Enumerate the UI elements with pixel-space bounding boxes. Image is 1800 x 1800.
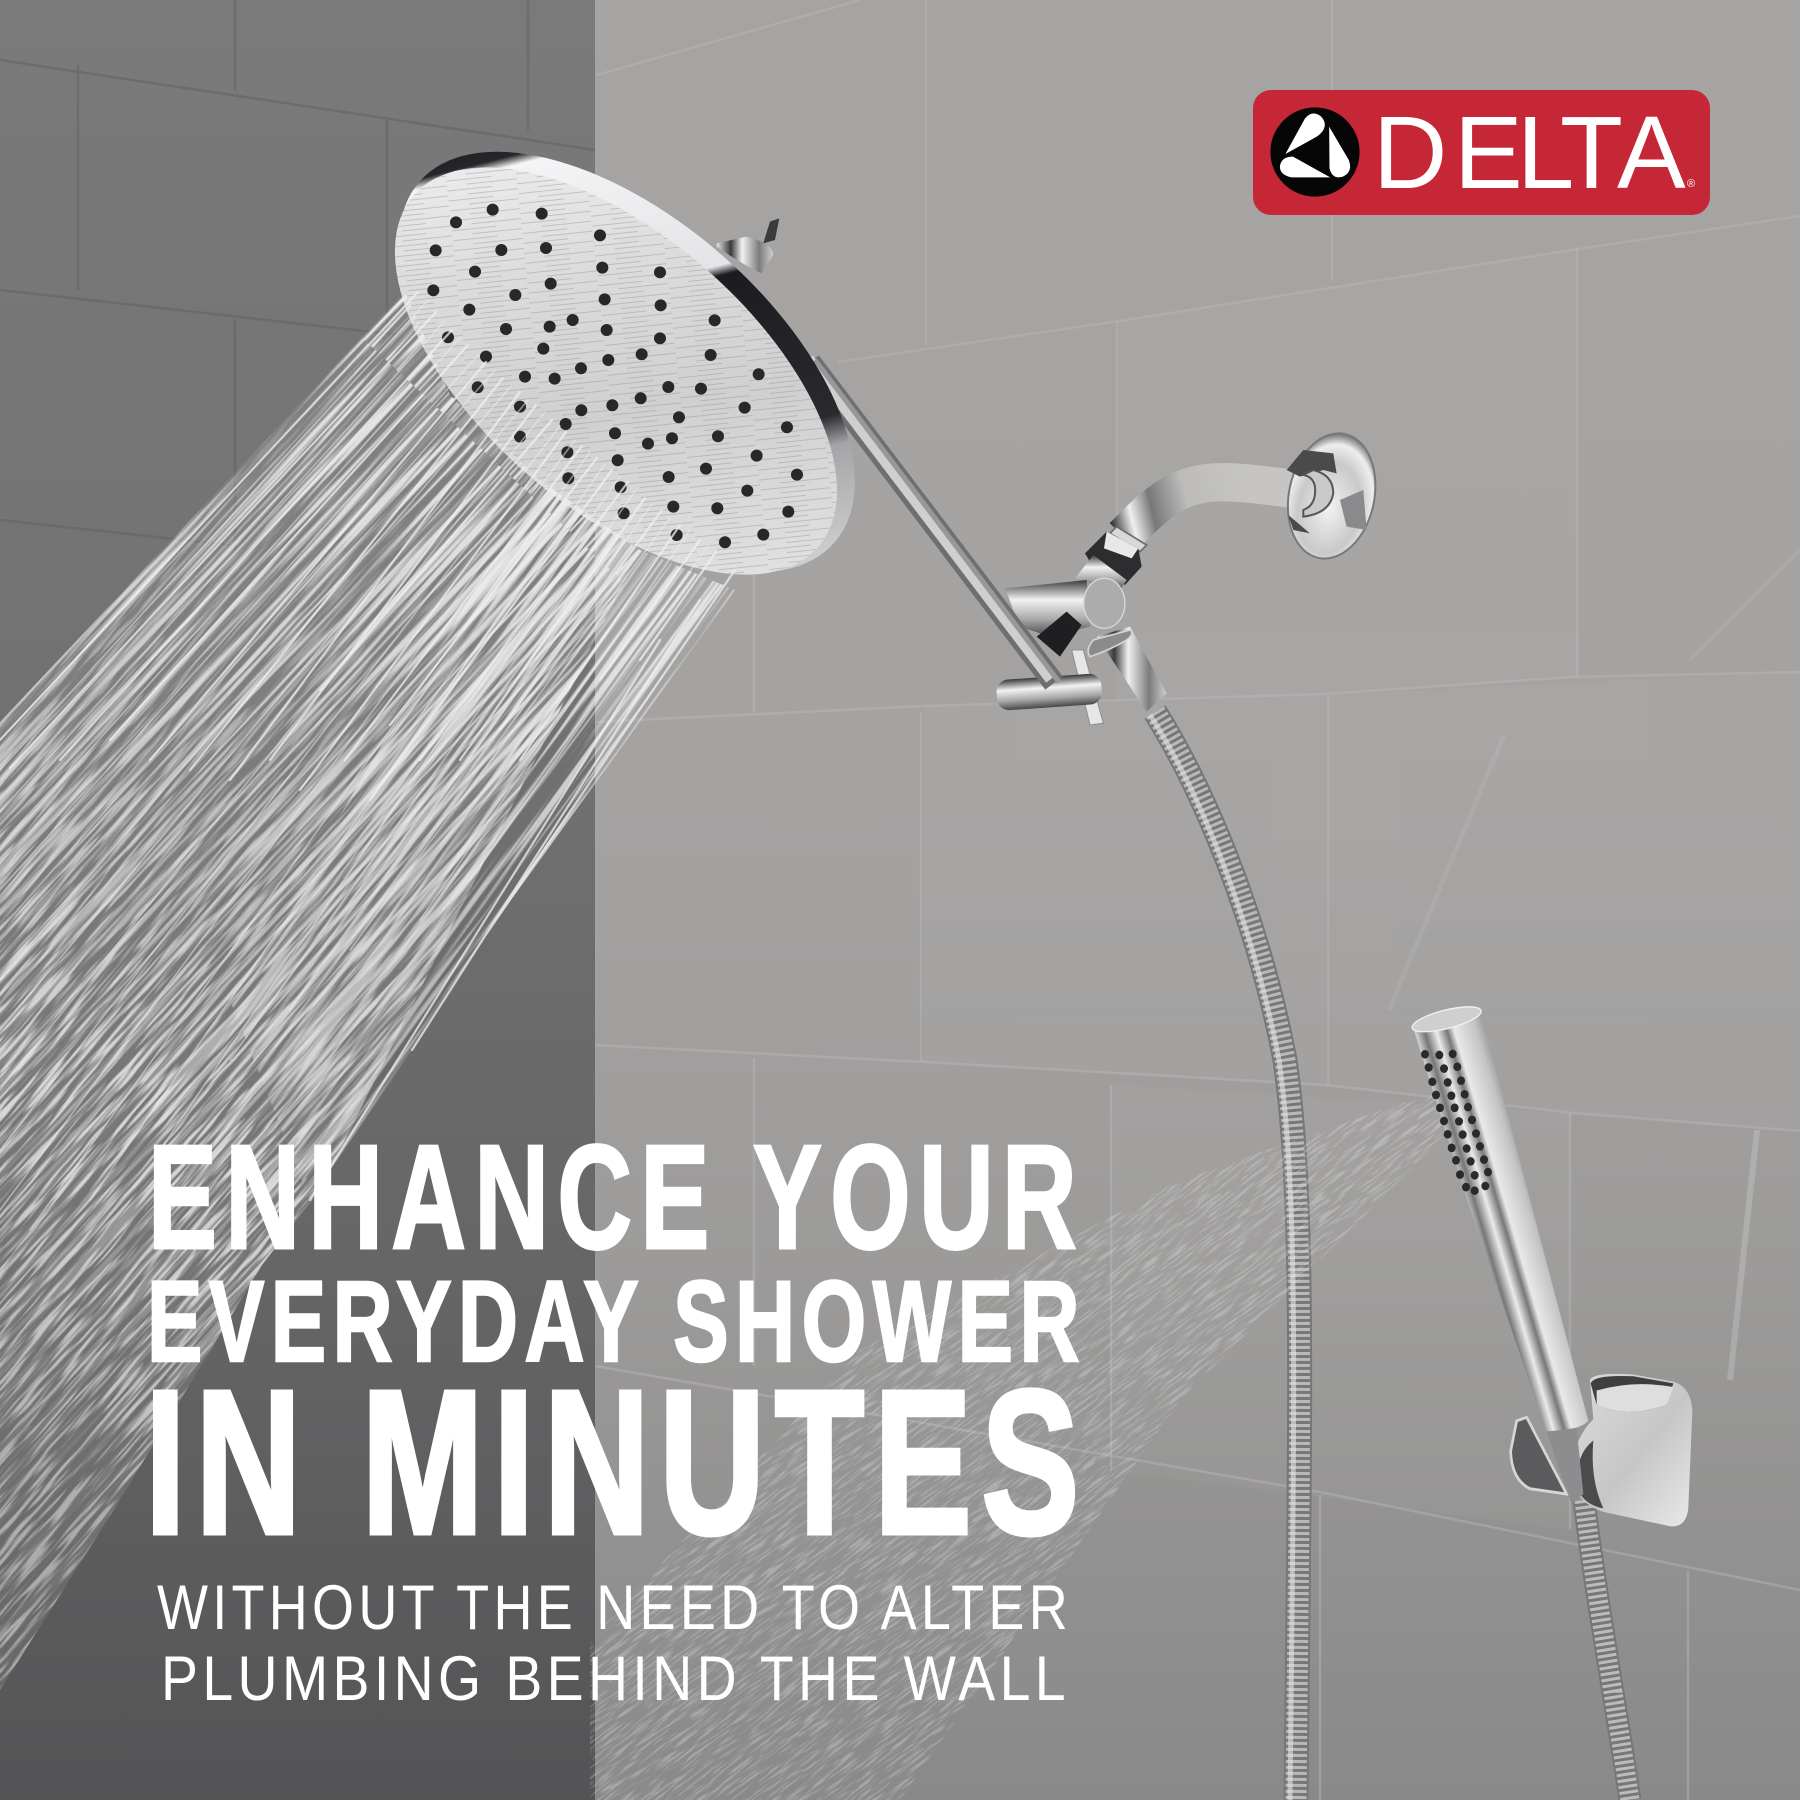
badge background xyxy=(1253,90,1710,215)
spray long streaks, right xyxy=(230,480,735,1200)
headline line 2: EVERYDAY SHOWER xyxy=(147,1258,1086,1386)
shower head xyxy=(325,74,928,650)
registered mark: ® xyxy=(1687,178,1695,190)
wall holder xyxy=(1570,1374,1692,1526)
brushed texture xyxy=(325,93,907,649)
bright water jets xyxy=(0,292,735,1230)
Delta logo badge xyxy=(1253,90,1710,215)
diverter body xyxy=(1005,580,1090,637)
arm nut xyxy=(1037,612,1082,657)
subheading line 1: WITHOUT THE NEED TO ALTER xyxy=(157,1573,1072,1643)
diverter knob disc xyxy=(1084,578,1125,628)
holder top opening xyxy=(1591,1376,1673,1412)
hand shower xyxy=(1410,1002,1692,1526)
Delta emblem xyxy=(1270,107,1360,197)
head face xyxy=(325,93,907,649)
water spray from rain head xyxy=(0,292,735,1690)
head rim xyxy=(326,74,928,650)
wall flange xyxy=(1277,425,1387,567)
wall reflections of water xyxy=(1389,550,1800,1380)
swivel pivot xyxy=(717,218,779,273)
subheading line 2: PLUMBING BEHIND THE WALL xyxy=(161,1644,1070,1714)
extension rod xyxy=(808,359,1059,683)
holder inner band xyxy=(1577,1441,1603,1508)
background: left dark tiled wall xyxy=(0,0,595,1800)
tile tone variation xyxy=(924,249,1800,1530)
background: right tiled wall xyxy=(594,0,1800,1800)
Delta wordmark: DELTA xyxy=(1373,95,1686,210)
shower arm and diverter bracket xyxy=(996,425,1387,725)
holder left grip xyxy=(1511,1417,1567,1494)
shower arm pipe xyxy=(1123,482,1303,537)
nozzles xyxy=(433,210,797,542)
spray face nozzles xyxy=(1425,1054,1488,1191)
main flexible hose xyxy=(1150,712,1300,1800)
wand end cap xyxy=(1410,1002,1483,1037)
headline line 1: ENHANCE YOUR xyxy=(148,1115,1085,1280)
threaded nut xyxy=(1085,527,1147,585)
lower hose to holder xyxy=(1584,1500,1630,1800)
spray haze xyxy=(0,292,640,1690)
lower hose connector xyxy=(1097,627,1167,712)
headline xyxy=(145,1115,1089,1577)
spray grain, far field xyxy=(0,292,640,1690)
wand body xyxy=(1413,1010,1588,1432)
rod clamp xyxy=(996,673,1103,711)
neck connector xyxy=(1075,555,1127,590)
lower wand stem xyxy=(1547,1428,1583,1505)
swivel ring xyxy=(1088,630,1132,657)
spray long streaks, left xyxy=(0,292,640,1690)
subheading xyxy=(157,1573,1072,1714)
cross handle xyxy=(1072,650,1103,725)
headline line 3: IN MINUTES xyxy=(145,1348,1089,1577)
fine spray from hand shower xyxy=(590,1090,1450,1800)
